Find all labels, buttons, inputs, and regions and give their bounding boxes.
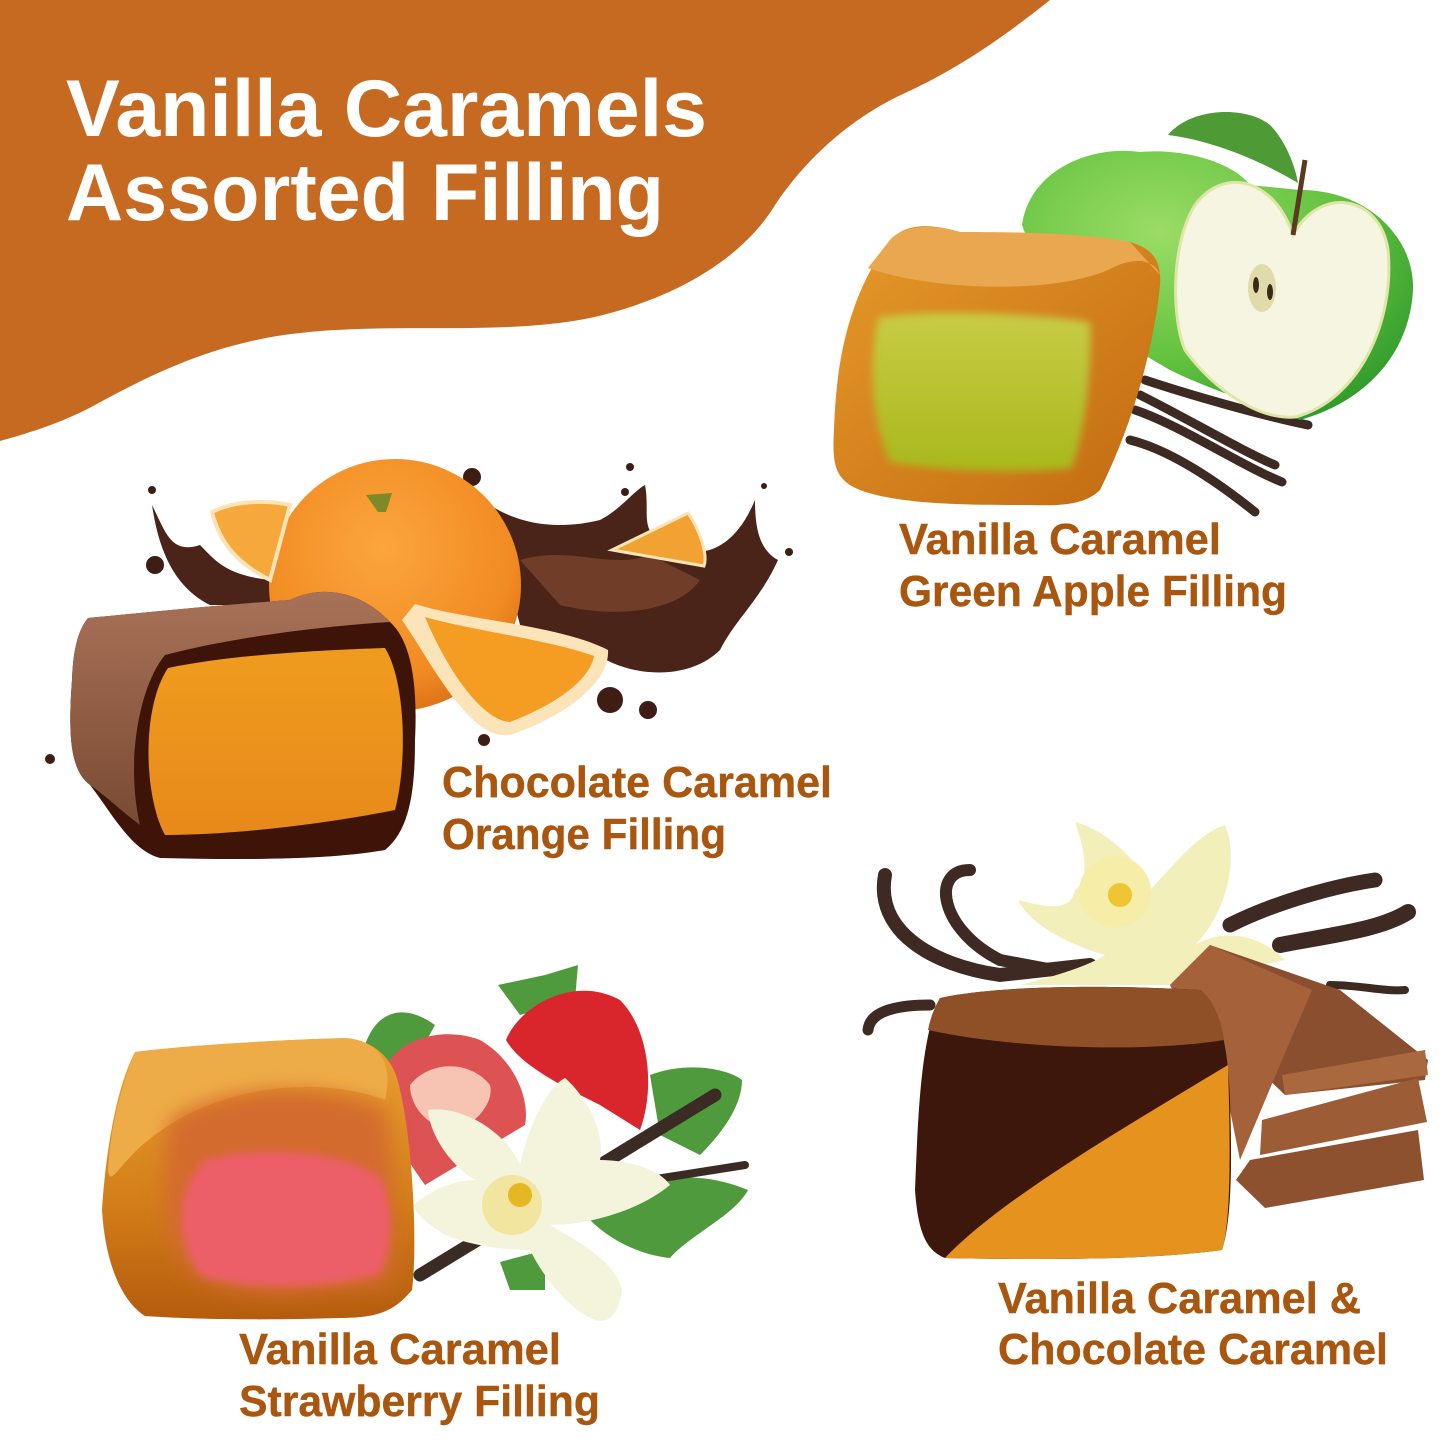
label: strawberry [239, 1325, 600, 1426]
title [66, 64, 707, 238]
label: chocolate: Chocolate Caramel [998, 1325, 1388, 1374]
illustration: green apple caramel [833, 112, 1413, 512]
icon: orange wedges [212, 502, 290, 580]
header banner [0, 0, 1050, 441]
title: Assorted Filling [66, 148, 664, 238]
icon: whole orange [269, 459, 521, 711]
icon: strawberry caramel piece [102, 1038, 414, 1319]
label: green apple [899, 515, 1287, 616]
illustration: vanilla and chocolate caramel [868, 822, 1428, 1259]
icon: vanilla flower [1018, 822, 1285, 985]
icon: whole strawberry [506, 991, 648, 1130]
icon: half and half caramel piece [915, 987, 1231, 1259]
icon: apple half [1176, 182, 1389, 417]
title: Vanilla Caramels [66, 64, 707, 154]
label: strawberry: Strawberry Filling [239, 1377, 600, 1426]
icon: vanilla flower [414, 1078, 670, 1321]
icon: chocolate caramel piece [70, 592, 416, 859]
icon: green apple caramel piece [833, 226, 1160, 505]
icon: vanilla pods [420, 1095, 745, 1275]
illustration: strawberry caramel [102, 965, 748, 1321]
icon: vanilla pods [1130, 380, 1308, 512]
label: strawberry: Vanilla Caramel [239, 1325, 561, 1374]
icon: whole green apple [1022, 151, 1413, 420]
chocolate splash [152, 485, 778, 672]
label: orange: Orange Filling [442, 810, 726, 859]
icon: chocolate pieces [1170, 945, 1428, 1095]
label: orange: Chocolate Caramel [442, 758, 832, 807]
illustration: orange caramel [45, 459, 793, 859]
icon: cut strawberry [380, 1034, 526, 1185]
label: orange [442, 758, 832, 859]
label: chocolate: Vanilla Caramel & [998, 1274, 1361, 1323]
label: green apple: Vanilla Caramel [899, 515, 1221, 564]
label: green apple: Green Apple Filling [899, 567, 1287, 616]
icon: green leaf [1168, 112, 1298, 183]
icon: vanilla pods [868, 870, 1408, 1030]
icon: mint leaves [365, 965, 748, 1290]
label: chocolate [998, 1274, 1388, 1374]
